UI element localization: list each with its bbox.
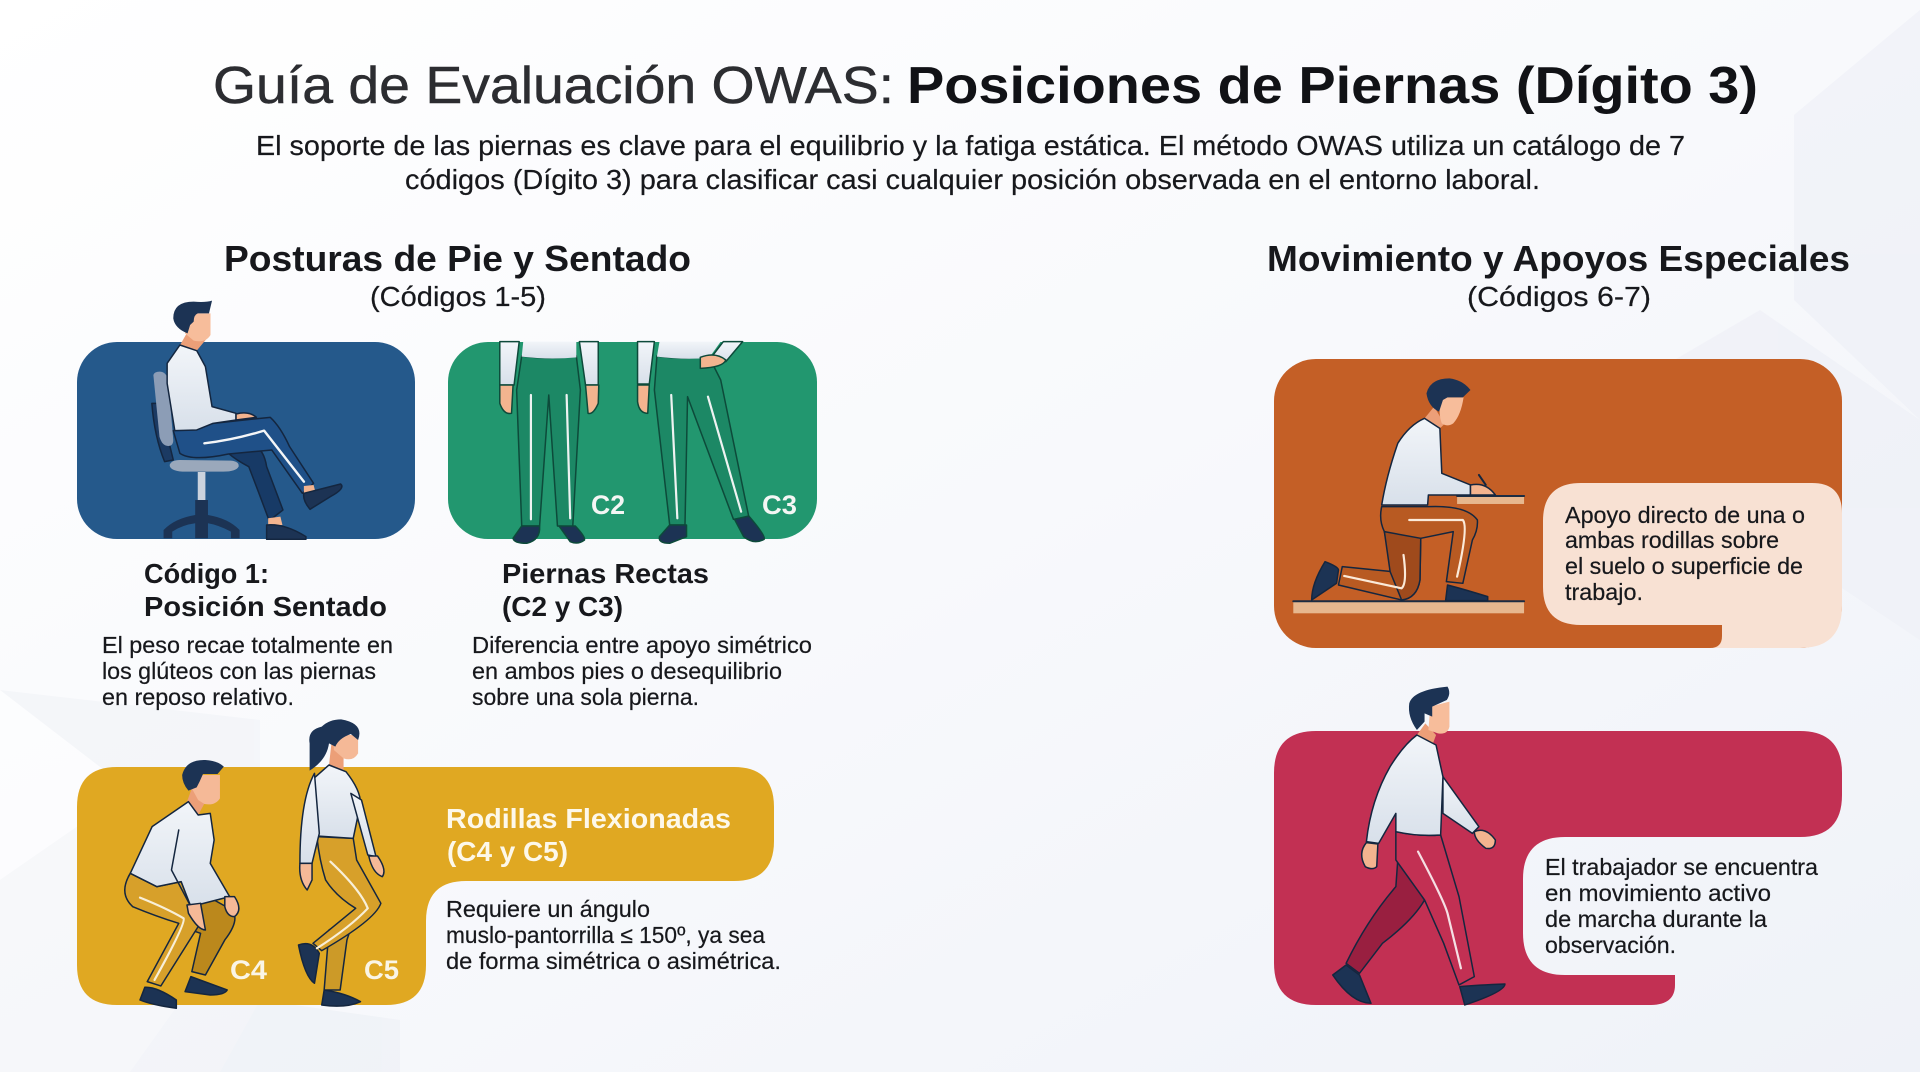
text block: piernas rectas: sobre una sola pierna.: [472, 684, 699, 710]
heading: posturas de pie y sentado: Posturas de Pie y Sentado: [224, 238, 691, 279]
callout text: Apoyo directo de una o: [1565, 502, 1805, 528]
heading: movimiento y apoyos especiales: [1267, 238, 1850, 312]
text block: piernas rectas: [472, 558, 812, 710]
label: C5: C5: [364, 955, 399, 985]
intro text: El soporte de las piernas es clave para el equilibrio y la fatiga estática. El método OWAS utiliza un catálogo de 7: [256, 130, 1685, 161]
callout text: observación.: [1545, 932, 1676, 958]
panel heading: (C4 y C5): [447, 836, 568, 867]
figure: one knee bent woman C5: [298, 719, 384, 1006]
text block: codigo 1: El peso recae totalmente en: [102, 632, 393, 658]
figure: walking worker: [1333, 687, 1505, 1005]
panel heading: Rodillas Flexionadas: [446, 803, 731, 834]
heading: posturas de pie y sentado: (Códigos 1-5): [370, 281, 546, 312]
title: Guía de Evaluación OWAS:: [213, 57, 894, 115]
callout text: [1545, 854, 1818, 958]
text block: codigo 1: en reposo relativo.: [102, 684, 294, 710]
panel: codigo 1 sentado: [77, 301, 415, 539]
label: C2: C2: [591, 490, 625, 520]
panel: marcha: [1274, 687, 1842, 1005]
text block: piernas rectas: Diferencia entre apoyo simétrico: [472, 632, 812, 658]
panel description: [446, 896, 781, 974]
text block: codigo 1: Código 1:: [144, 558, 269, 589]
label: C4: C4: [230, 955, 267, 985]
figure: kneeling worker writing: [1293, 378, 1524, 613]
callout text: ambas rodillas sobre: [1565, 527, 1779, 553]
panel description: Requiere un ángulo: [446, 896, 650, 922]
text block: piernas rectas: (C2 y C3): [502, 591, 623, 622]
heading: movimiento y apoyos especiales: Movimiento y Apoyos Especiales: [1267, 238, 1850, 279]
label: C3: C3: [762, 490, 797, 520]
title: Posiciones de Piernas (Dígito 3): [907, 57, 1758, 115]
heading: movimiento y apoyos especiales: (Códigos 6-7): [1467, 281, 1651, 312]
text block: codigo 1: Posición Sentado: [144, 591, 387, 622]
figure: seated worker on chair: [152, 301, 342, 539]
text block: codigo 1: los glúteos con las piernas: [102, 658, 376, 684]
intro text: códigos (Dígito 3) para clasificar casi cualquier posición observada en el entorno laboral.: [405, 164, 1540, 195]
callout text: en movimiento activo: [1545, 880, 1771, 906]
title: [213, 57, 1758, 115]
callout: light box: [1543, 483, 1842, 648]
text block: piernas rectas: Piernas Rectas: [502, 558, 709, 589]
panel: piernas rectas c2 c3: [448, 342, 817, 543]
callout text: [1565, 502, 1805, 605]
text block: piernas rectas: en ambos pies o desequilibrio: [472, 658, 782, 684]
figure: standing legs: [500, 342, 764, 543]
figure: squatting man C4: [125, 760, 239, 1008]
callout text: el suelo o superficie de: [1565, 553, 1803, 579]
heading: posturas de pie y sentado: [224, 238, 691, 312]
intro text: [256, 130, 1685, 195]
panel description: de forma simétrica o asimétrica.: [446, 948, 781, 974]
text block: codigo 1: [102, 558, 393, 710]
callout text: El trabajador se encuentra: [1545, 854, 1818, 880]
panel: apoyo de rodillas: [1274, 359, 1842, 648]
panel heading: [446, 803, 731, 867]
panel description: muslo-pantorrilla ≤ 150º, ya sea: [446, 922, 765, 948]
panel: rodillas flexionadas: [77, 719, 781, 1008]
callout text: trabajo.: [1565, 579, 1643, 605]
callout text: de marcha durante la: [1545, 906, 1767, 932]
